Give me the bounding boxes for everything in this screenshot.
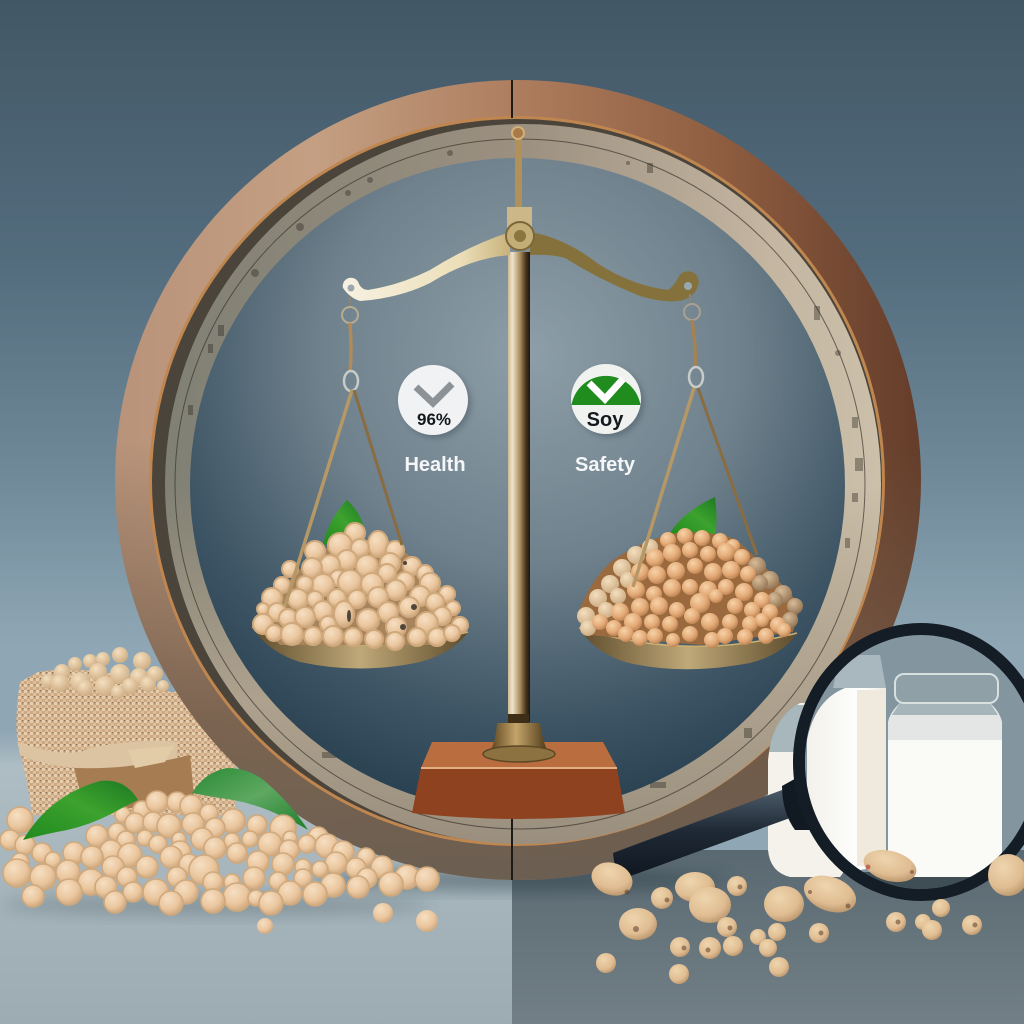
safety label: Safety [575,454,636,476]
burlap sack [16,670,235,815]
magnifier handle [613,776,818,878]
floor [0,730,1024,1024]
milk bottle behind lens [768,703,860,877]
ring scale markings [188,150,863,788]
scattered soybeans right [587,845,1024,984]
safety badge: Soy [587,409,624,431]
left hanging chain and strings [285,296,402,606]
leaf on left pan [322,500,364,548]
wooden ring frame [115,80,921,880]
right pile of beans [577,528,803,648]
health label: Health [404,454,466,476]
main soybean pile [0,791,439,915]
left leaf by pile [23,781,138,840]
health badge: 96% [417,410,451,429]
magnifier rim [799,629,1024,895]
safety badge [571,364,644,437]
beans in sack [41,647,169,699]
stray beans left [257,903,438,934]
magnifier lens contents [805,635,1024,889]
right leaf by pile [192,768,308,830]
scale base pedestal [483,714,555,762]
bean dark spots [624,864,978,952]
right hanging chain and strings [633,294,757,587]
scale post [508,252,530,722]
health badge [398,365,471,438]
wooden scale base block [412,742,625,819]
right pan [579,628,797,669]
ring opening [190,158,845,812]
pile ground shadow [0,895,430,915]
leaf on right pan [669,497,716,536]
left pan [252,627,468,668]
scale beam [343,222,699,301]
left pile of beans [253,523,468,650]
wheel shadow on floor [310,870,730,890]
scale top hanger [507,127,532,235]
